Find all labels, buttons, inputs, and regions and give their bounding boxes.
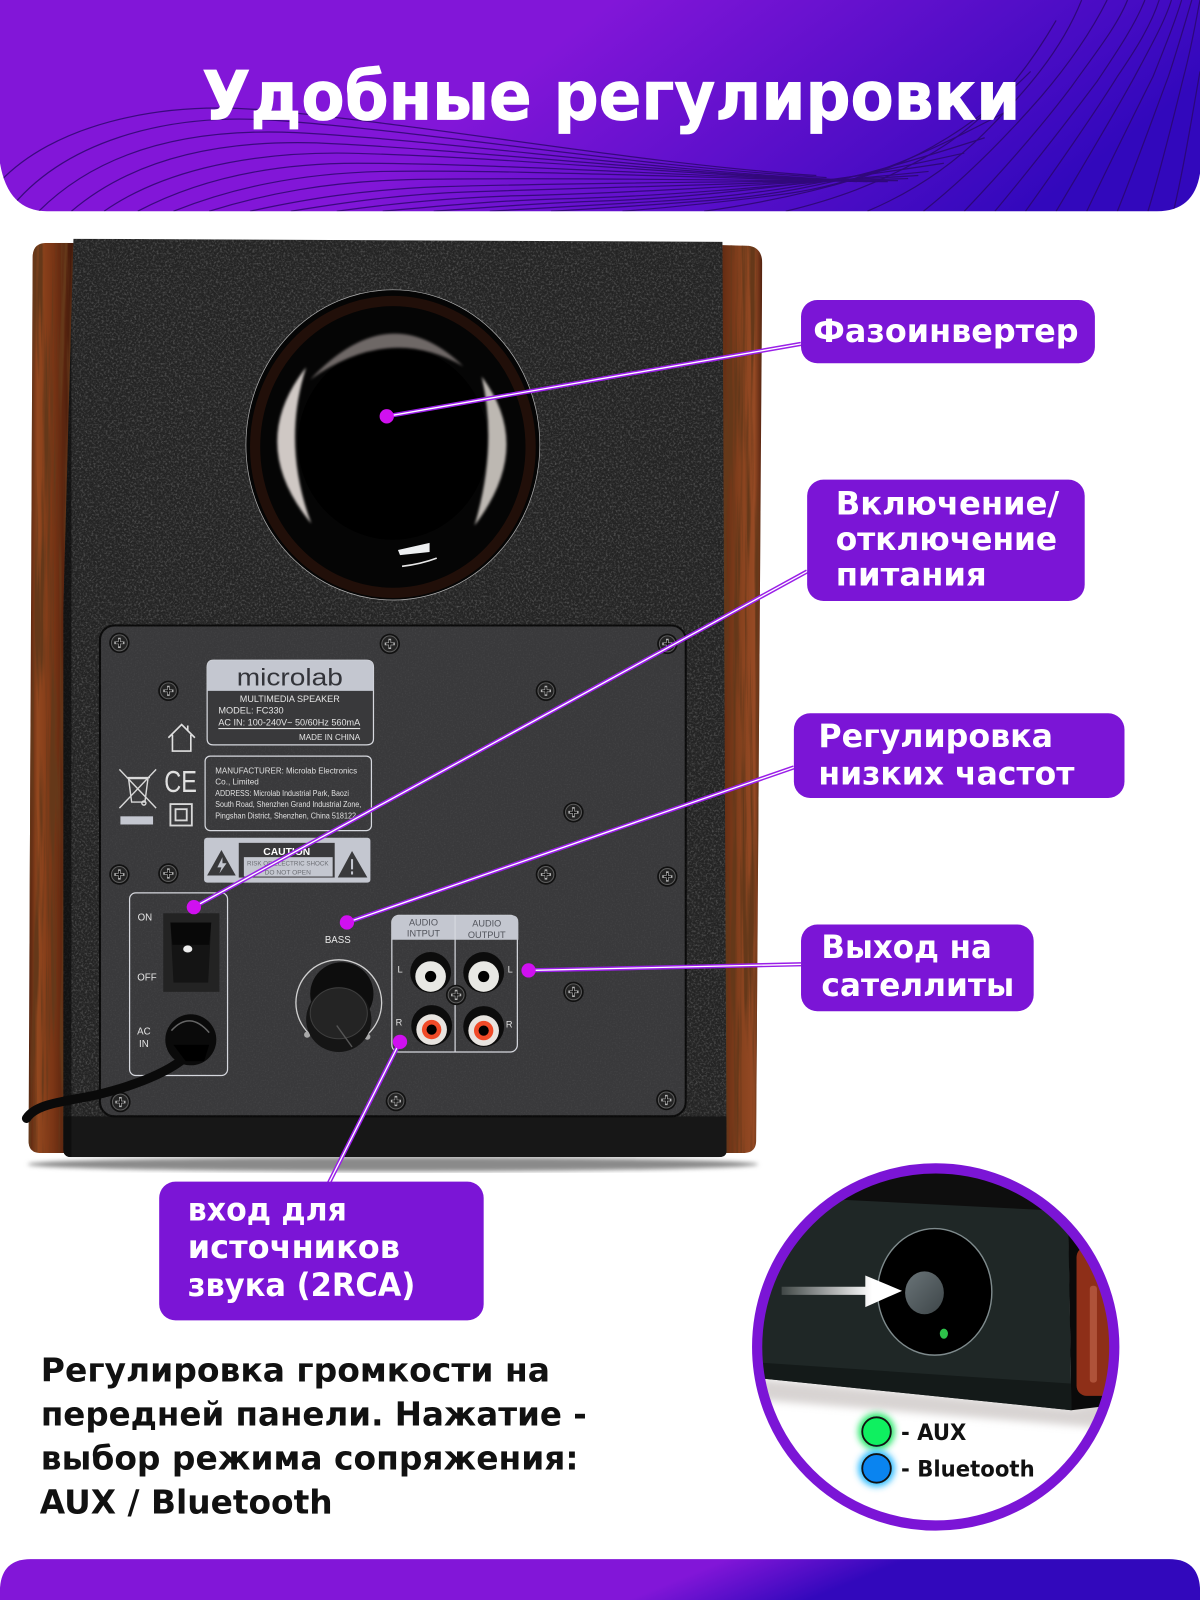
manufacturer label: Pingshan District, Shenzhen, China 518122 [215, 811, 357, 820]
label: bass adjustment: Регулировка [818, 719, 1053, 755]
power section: OFF [137, 973, 157, 984]
audio connector block [392, 915, 518, 1052]
power section [27, 893, 228, 1118]
label: satellite output: Выход на [821, 930, 992, 966]
label: audio source input: вход для [188, 1192, 347, 1228]
label: audio source input: источников [188, 1230, 400, 1266]
manufacturer label: MANUFACTURER: Microlab Electronics [215, 766, 357, 775]
header banner [0, 0, 1200, 211]
microlab label: microlab [237, 665, 343, 692]
icon: CE mark: CE [164, 765, 197, 799]
rocker switch [163, 913, 219, 992]
floor shadow under cabinet [760, 1379, 1112, 1429]
header wave lines [0, 0, 1200, 211]
microlab label: MODEL: FC330 [218, 705, 284, 715]
legend: Bluetooth [858, 1450, 1035, 1487]
legend: AUX [858, 1413, 966, 1450]
microlab label: MADE IN CHINA [299, 733, 361, 742]
label: power on/off: Включение/ [836, 486, 1060, 522]
bass knob [296, 935, 382, 1052]
purple ring [757, 1168, 1114, 1526]
floor shadow [28, 1157, 758, 1171]
wood side panels [29, 243, 763, 1153]
manufacturer label: Co., Limited [215, 778, 259, 787]
caution label [204, 838, 370, 883]
label: phase inverter [801, 300, 1095, 363]
description text: Регулировка громкости на [41, 1352, 550, 1390]
caution label: RISK OF ELECTRIC SHOCK [247, 860, 329, 867]
legend: AUX: - AUX [901, 1420, 966, 1446]
legend: Bluetooth: - Bluetooth [901, 1457, 1035, 1483]
label: audio source input [159, 1182, 484, 1320]
footer bar [0, 1559, 1200, 1600]
power section: ON [138, 912, 152, 923]
callout line: output [521, 963, 801, 978]
RCA jacks [410, 952, 504, 1047]
label: power on/off [807, 480, 1085, 601]
leather cabinet [61, 237, 731, 1159]
callout line: port [380, 344, 801, 423]
power socket and cable [27, 1014, 216, 1118]
mounting screws [109, 633, 678, 1112]
bass knob: BASS [325, 935, 351, 946]
callout lines and dots [187, 344, 807, 1184]
icon: recycling bin crossed [119, 769, 156, 808]
microlab label: AC IN: 100-240V~ 50/60Hz 560mA [218, 718, 361, 728]
description text: AUX / Bluetooth [40, 1483, 333, 1521]
speaker rear photo [27, 237, 763, 1171]
manufacturer label [205, 756, 371, 831]
audio connector block: L [508, 964, 513, 974]
microlab label: MULTIMEDIA SPEAKER [240, 694, 340, 704]
audio connector block: R [396, 1018, 403, 1028]
audio connector block: AUDIO [409, 918, 438, 928]
white arrow [782, 1276, 902, 1307]
label: power on/off: отключение [836, 522, 1057, 558]
power section: AC [137, 1027, 151, 1038]
control panel plate [100, 626, 686, 1116]
audio connector block: AUDIO [472, 919, 501, 929]
audio connector block: OUTPUT [468, 930, 506, 940]
description text: передней панели. Нажатие - [41, 1396, 587, 1434]
volume knob recess [878, 1229, 992, 1355]
audio connector block: R [506, 1020, 513, 1030]
audio connector block: INTPUT [407, 929, 440, 939]
front leather face [750, 1194, 1071, 1410]
icon: house [168, 724, 195, 751]
audio connector block: L [397, 964, 403, 974]
callout line: bass [340, 767, 794, 930]
microlab label [207, 660, 373, 745]
label: phase inverter: Фазоинвертер [813, 314, 1079, 350]
label: audio source input: звука (2RCA) [188, 1268, 415, 1304]
top dark area [844, 1174, 1042, 1210]
manufacturer label: South Road, Shenzhen Grand Industrial Zone, [215, 800, 361, 809]
description text: выбор режима сопряжения: [41, 1439, 579, 1477]
label: bass adjustment [794, 713, 1124, 798]
label: satellite output [801, 924, 1034, 1011]
callout line: input [329, 1035, 407, 1184]
wood edge [1068, 1235, 1110, 1410]
callout line: power [187, 571, 807, 914]
title: Удобные регулировки [202, 56, 1020, 135]
label: power on/off: питания [836, 558, 987, 594]
caution label: CAUTION [263, 847, 310, 858]
manufacturer label: ADDRESS: Microlab Industrial Park, Baozi [215, 789, 349, 798]
bass reflex port [246, 290, 540, 600]
front panel detail circle [750, 1163, 1122, 1526]
label: satellite output: сателлиты [821, 968, 1014, 1004]
icon: double square [170, 804, 192, 826]
caution label: DO NOT OPEN [265, 869, 311, 876]
icon: disposal bar [120, 816, 153, 824]
power section: IN [139, 1039, 149, 1050]
label: bass adjustment: низких частот [818, 757, 1075, 793]
